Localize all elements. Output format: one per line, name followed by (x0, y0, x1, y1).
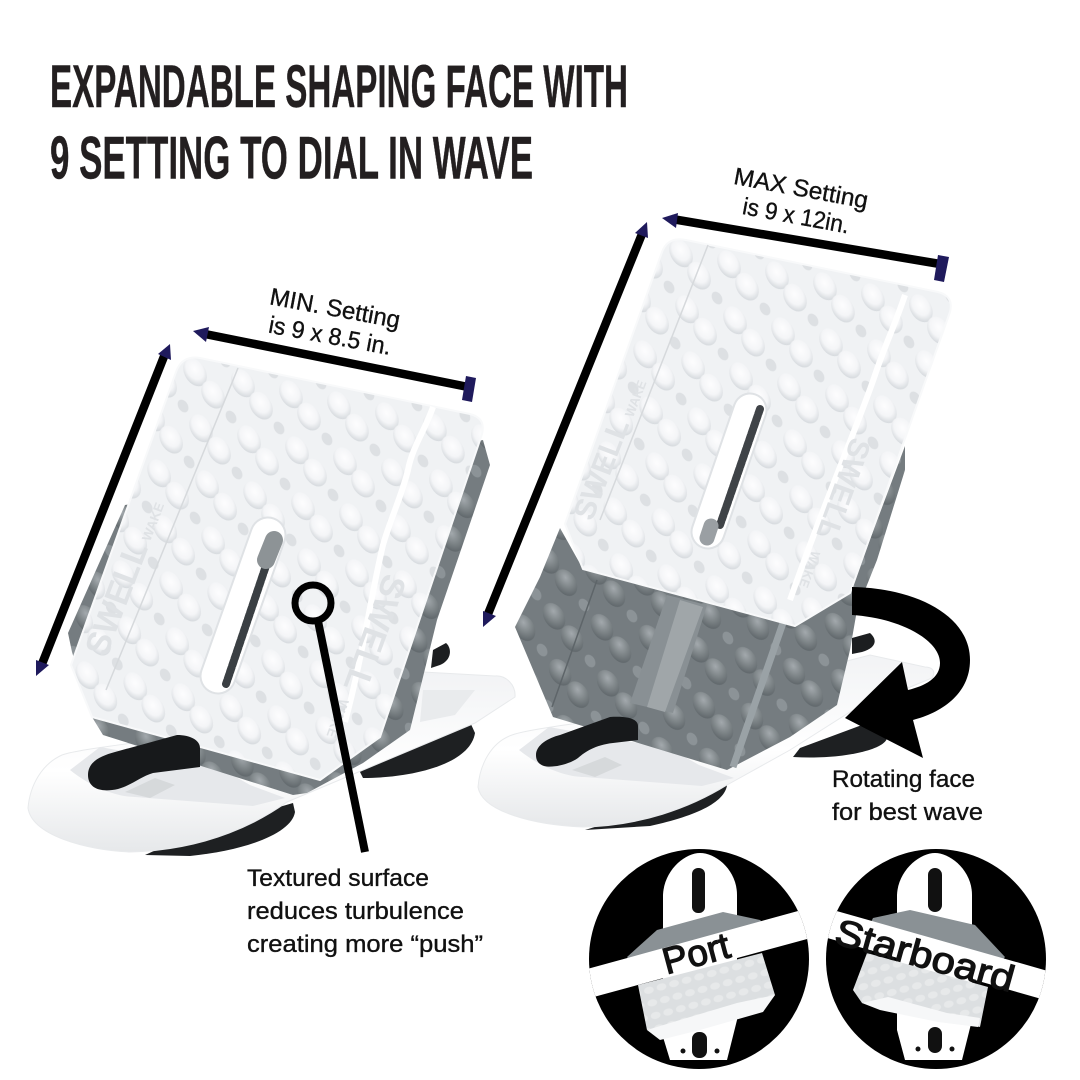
board (897, 853, 972, 1060)
hardware detail (572, 757, 622, 777)
callout text: textured surface: Textured surface (247, 865, 429, 892)
plate logo text: SWELL (78, 537, 156, 661)
dimension arrow: min height (36, 344, 171, 676)
title (50, 53, 628, 192)
callout text: rotating face: Rotating face (832, 766, 975, 793)
rear handle (431, 643, 450, 668)
badge: starboard: Starboard (831, 911, 1019, 1000)
black suction pads (145, 722, 475, 856)
white textured plate (71, 358, 483, 780)
adjustment slot (218, 535, 274, 684)
plate logo text: WAKE (139, 500, 167, 543)
callout text: rotating face: for best wave (832, 799, 983, 826)
title: EXPANDABLE SHAPING FACE WITH (50, 53, 628, 120)
dimension arrow: max width (662, 213, 949, 282)
plate logo text: SWELL (336, 569, 413, 697)
front clamp handle (88, 735, 200, 790)
plate side strips (600, 245, 905, 600)
badge: starboard (817, 849, 1055, 1069)
plate lip (862, 997, 980, 1027)
label: max setting: MAX Setting (732, 163, 870, 214)
label: min setting: is 9 x 8.5 in. (266, 312, 393, 361)
label: min setting: MIN. Setting (268, 283, 402, 334)
grey face (872, 910, 1005, 958)
dimension arrow: min width (193, 327, 476, 402)
white band (580, 911, 818, 998)
grey inner face behind plate (68, 440, 490, 795)
grey fold lines (552, 580, 597, 707)
plate logo text (78, 500, 413, 740)
dimension arrow: max height (483, 222, 648, 627)
black suction pads (585, 722, 887, 830)
plate lip (647, 995, 775, 1040)
base recess (519, 727, 734, 786)
white base plate (28, 672, 515, 852)
callout pointer: textured surface (295, 585, 365, 852)
handles and holes (680, 868, 720, 1058)
board (663, 853, 737, 1060)
product: minimum setting device (28, 358, 515, 856)
callout text: textured surface (247, 865, 483, 958)
rear handle (852, 633, 875, 654)
white textured plate (565, 239, 951, 626)
callout text: rotating face (832, 766, 983, 826)
adjustment slot (707, 409, 760, 538)
base recess (70, 747, 285, 806)
textured plate (853, 953, 988, 1027)
plate logo text: WAKE (324, 697, 352, 740)
label: min setting (263, 283, 402, 362)
front clamp handle (536, 717, 638, 767)
label: max setting (727, 163, 870, 242)
sliding channel frame (630, 595, 707, 713)
badge: port (580, 849, 818, 1069)
callout text: textured surface: creating more “push” (247, 931, 483, 958)
plate side strips (106, 368, 433, 722)
badge: port: Port (658, 925, 735, 982)
white band (828, 911, 1046, 998)
plate logo text (568, 378, 876, 590)
plate logo text: SWELL (568, 415, 636, 525)
base rear shading (420, 690, 475, 722)
plate logo text: WAKE (622, 378, 650, 419)
white base plate (478, 655, 934, 827)
hardware detail (125, 778, 175, 798)
textured plate (638, 953, 775, 1030)
callout text: textured surface: reduces turbulence (247, 898, 464, 925)
grey face (627, 912, 762, 958)
sliding channel insert (647, 600, 703, 712)
plate logo text: SWELL (810, 434, 876, 544)
label: max setting: is 9 x 12in. (740, 193, 851, 239)
plate logo text: WAKE (796, 549, 823, 590)
arrow: rotation (845, 587, 970, 758)
handles and holes (916, 868, 954, 1053)
grey inner face (515, 446, 905, 770)
title: 9 SETTING TO DIAL IN WAVE (50, 124, 533, 192)
product: maximum setting device (478, 239, 951, 830)
